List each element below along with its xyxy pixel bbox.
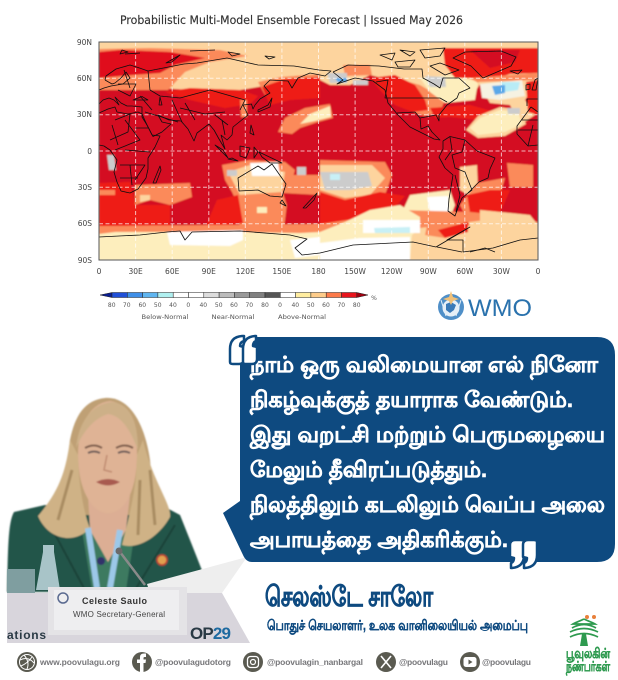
table backdrop text ations: ations xyxy=(7,628,46,642)
speaker role in Tamil: பொதுச் செயலாளர், உலக வானிலையியல் அமைப்பு xyxy=(267,617,528,634)
longitude axis labels xyxy=(97,267,541,276)
legend tick labels: 60 xyxy=(322,302,330,309)
Poovulagin Nanbargal logo xyxy=(565,615,610,676)
microphone xyxy=(116,548,145,585)
map colour regions xyxy=(99,42,538,260)
map frame xyxy=(99,42,538,260)
speaker figure xyxy=(7,398,205,592)
latitude axis labels xyxy=(77,38,92,265)
legend tick labels: 80 xyxy=(108,302,116,309)
latitude axis labels: 30S xyxy=(78,183,92,192)
longitude axis labels: 120W xyxy=(381,267,403,276)
map graticule xyxy=(99,42,538,260)
paper sheet xyxy=(147,557,247,593)
legend tick labels: 60 xyxy=(138,302,146,309)
longitude axis labels: 30E xyxy=(128,267,143,276)
quote text: மேலும் தீவிரப்படுத்தும். xyxy=(250,457,487,485)
legend tick labels: 0 xyxy=(186,302,190,309)
table backdrop text COP29: OP29 xyxy=(190,624,231,643)
longitude axis labels: 150W xyxy=(344,267,367,276)
X link xyxy=(376,652,448,672)
nameplate xyxy=(48,587,187,635)
legend tick labels: 50 xyxy=(215,302,223,309)
latitude axis labels: 90N xyxy=(77,38,92,47)
colour legend xyxy=(100,292,377,321)
longitude axis labels: 30W xyxy=(493,267,510,276)
X link: @poovulagu xyxy=(399,657,448,667)
YouTube link: @poovulagu xyxy=(482,657,531,667)
legend tick labels: 40 xyxy=(169,302,177,309)
quote text: நிகழ்வுக்குத் தயாராக வேண்டும். xyxy=(249,387,573,415)
WMO logo xyxy=(438,291,532,322)
legend tick labels xyxy=(108,295,377,321)
legend tick labels: Near-Normal xyxy=(212,314,255,321)
legend tick labels: Below-Normal xyxy=(142,314,189,321)
photo: Celeste Saulo at desk xyxy=(7,398,250,643)
latitude axis labels: 30N xyxy=(77,110,92,119)
legend colour bar xyxy=(100,292,368,298)
WMO wordmark: WMO xyxy=(468,295,532,322)
coastlines xyxy=(99,48,538,255)
latitude axis labels: 90S xyxy=(78,256,92,265)
latitude axis labels: 60N xyxy=(77,74,92,83)
longitude axis labels: 90W xyxy=(420,267,437,276)
quote text: நிலத்திலும் கடலிலும் வெப்ப அலை xyxy=(249,492,605,520)
YouTube link xyxy=(460,652,531,672)
instagram link: @poovulagin_nanbargal xyxy=(267,657,363,667)
nameplate: Celeste Saulo xyxy=(82,596,148,606)
longitude axis labels: 90E xyxy=(202,267,216,276)
longitude axis labels: 0 xyxy=(536,267,541,276)
longitude axis labels: 180 xyxy=(311,267,326,276)
longitude axis labels: 120E xyxy=(236,267,255,276)
legend tick labels: 70 xyxy=(337,302,345,309)
quote text: இது வறட்சி மற்றும் பெருமழையை xyxy=(249,422,605,450)
longitude axis labels: 60W xyxy=(456,267,474,276)
icon: tree xyxy=(570,615,598,646)
map: probabilistic temperature forecast xyxy=(77,38,541,276)
longitude axis labels: 0 xyxy=(97,267,102,276)
footer social links xyxy=(17,652,531,672)
speaker name in Tamil: செலஸ்டே சாலோ xyxy=(265,581,433,612)
facebook link xyxy=(132,652,231,672)
bubble shape xyxy=(223,337,615,562)
legend tick labels: 60 xyxy=(230,302,238,309)
legend tick labels: 0 xyxy=(278,302,282,309)
legend tick labels: 50 xyxy=(307,302,315,309)
icon: opening quote mark xyxy=(230,336,257,364)
longitude axis labels: 60E xyxy=(165,267,180,276)
nameplate: WMO Secretary-General xyxy=(73,610,165,619)
legend tick labels: Above-Normal xyxy=(278,314,326,321)
legend tick labels: 70 xyxy=(123,302,131,309)
website link xyxy=(17,652,120,672)
legend tick labels: 40 xyxy=(199,302,207,309)
latitude axis labels: 60S xyxy=(78,219,92,228)
facebook link: @poovulagudotorg xyxy=(155,657,231,667)
quote text: நாம் ஒரு வலிமையான எல் நினோ xyxy=(249,352,599,380)
quote text xyxy=(249,352,605,555)
legend tick labels: 80 xyxy=(261,302,269,309)
water bottle and glass xyxy=(7,545,60,593)
legend tick labels: 40 xyxy=(291,302,299,309)
legend tick labels: 50 xyxy=(154,302,162,309)
icon: WMO emblem xyxy=(438,291,464,320)
legend tick labels: 80 xyxy=(353,302,361,309)
latitude axis labels: 0 xyxy=(87,147,92,156)
legend tick labels: % xyxy=(371,295,377,302)
longitude axis labels: 150E xyxy=(272,267,292,276)
legend tick labels: 70 xyxy=(245,302,253,309)
website link: www.poovulagu.org xyxy=(39,657,120,667)
table front xyxy=(7,593,250,643)
speech bubble xyxy=(223,336,615,568)
title: Probabilistic Multi-Model Ensemble Forecast | Issued May 2026 xyxy=(120,13,463,27)
instagram link xyxy=(243,652,363,672)
quote text: அபாயத்தை அதிகரிக்கும். xyxy=(250,527,508,555)
icon: closing quote mark xyxy=(510,540,537,568)
